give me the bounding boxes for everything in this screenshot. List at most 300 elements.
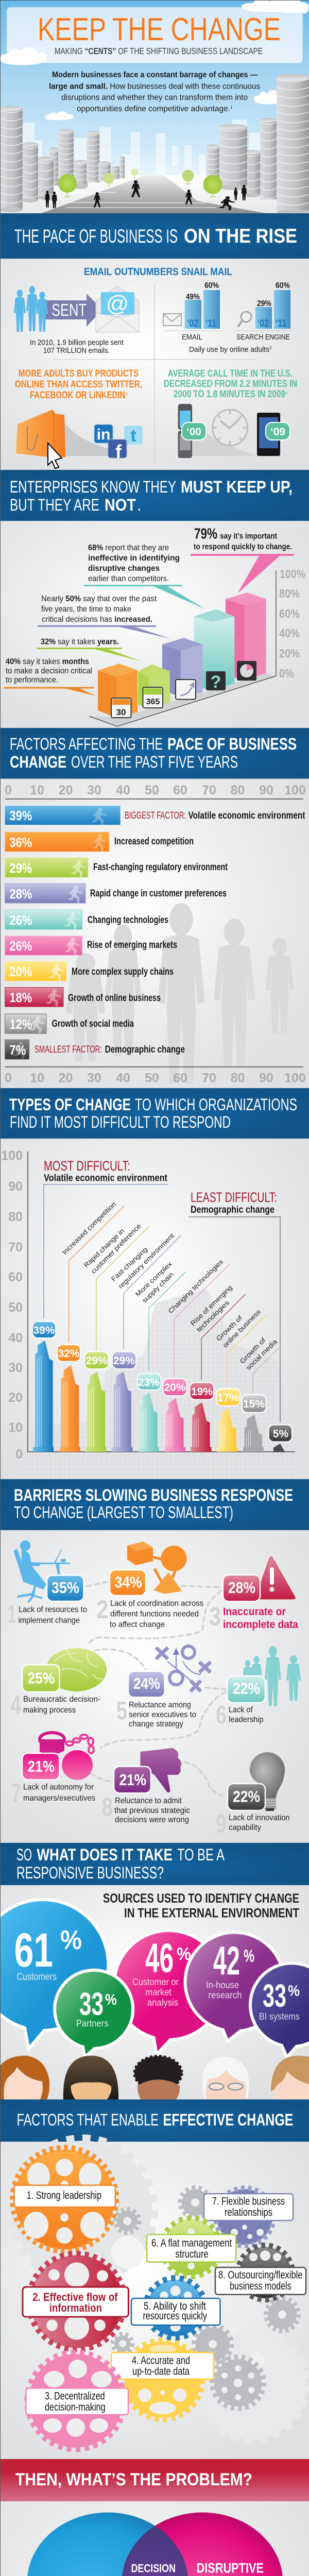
- trees: [58, 168, 222, 197]
- callout: call time: [164, 368, 297, 400]
- pale distant towers: [23, 120, 261, 175]
- callout: 68%: ineffective in identifying: [88, 554, 180, 563]
- bubble: market analysis 46%: analysis: [147, 1997, 178, 2008]
- bar: 26% teal: 26%: [9, 912, 32, 928]
- bubble: BI systems 33%: %: [288, 1982, 300, 1999]
- gear 2: effective flow of information: information: [49, 2301, 102, 2314]
- icon: shopping bag and social media: t: [130, 426, 136, 446]
- gear 2: effective flow of information: 2. Effective flow of: [32, 2291, 118, 2303]
- badges: 29%: [113, 1355, 135, 1367]
- barrier 1: 35%: [52, 1579, 79, 1597]
- bar: 36%: Increased competition: [114, 836, 194, 847]
- barrier 7: managers/executives: [23, 1794, 95, 1803]
- bar: 39%: 39%: [9, 808, 32, 823]
- y axis: 70: [8, 1240, 23, 1255]
- barrier 5: change strategy: [129, 1720, 183, 1728]
- callout: most difficult: MOST DIFFICULT:: [44, 1158, 130, 1174]
- icon: stopwatch: [237, 661, 256, 681]
- heading: factors pace of change: FACTORS AFFECTING THE: [10, 735, 163, 753]
- heading: enterprises must keep up: BUT THEY ARE: [10, 496, 99, 514]
- axis top: 30: [87, 783, 101, 798]
- venn diagram: [27, 2513, 283, 2576]
- bar: 7%: SMALLEST FACTOR:: [35, 1044, 102, 1055]
- axis bottom: 90: [259, 1071, 273, 1086]
- intro text: Modern businesses face a constant barrage of changes —: [52, 71, 258, 79]
- icon: envelope: [163, 314, 181, 326]
- bar chart: daily use: 60%: [276, 281, 290, 290]
- barrier 7: Lack of autonomy for: [23, 1783, 94, 1792]
- bar: 26% teal: Changing technologies: [88, 915, 168, 925]
- callout: online buying: ONLINE THAN ACCESS TWITTER,: [15, 379, 142, 390]
- heading: effective change: [0, 2099, 309, 2142]
- heading: pace of business: [0, 213, 309, 259]
- heading: responsive business: TO BE A: [177, 1845, 225, 1864]
- small gray gears: [113, 2188, 298, 2408]
- ghost runners: [66, 903, 294, 1083]
- icon: people sending email: SENT: [52, 300, 87, 319]
- barrier 8: Reluctance to admit: [115, 1797, 182, 1805]
- barrier 2: 2: [97, 1595, 108, 1624]
- axis top: [5, 783, 306, 800]
- subtitle: MAKING “CENTS” OF THE SHIFTING BUSINESS LANDSCAPE: [55, 46, 263, 56]
- bar chart: daily use: ‘02: [187, 318, 198, 329]
- barrier 5: Reluctance among: [129, 1701, 191, 1709]
- axis bottom: 10: [30, 1071, 44, 1086]
- y axis: 80: [8, 1210, 23, 1224]
- gear 7: flexible business relationships: relationships: [225, 2207, 272, 2218]
- bubble: market analysis 46%: %: [177, 1944, 191, 1964]
- callout: 40%: 40% say it takes months: [6, 657, 89, 666]
- road: [41, 175, 266, 213]
- barrier 8: that previous strategic: [114, 1806, 190, 1815]
- barrier 4: [10, 1648, 107, 1719]
- barrier 6: Lack of: [229, 1706, 253, 1715]
- axis top: 60: [173, 783, 187, 798]
- heading: what's the problem: THEN, WHAT’S THE PROBLEM?: [15, 2470, 252, 2489]
- icon: people sending email: [14, 286, 139, 332]
- panel: enterprises 3D chart: [0, 521, 309, 728]
- gear 4: accurate data: up-to-date data: [132, 2366, 190, 2378]
- barrier 7: 21%: [28, 1757, 55, 1775]
- rotated labels: Growth of: [238, 1336, 267, 1365]
- barrier 6: 22%: [233, 1680, 260, 1697]
- heading: factors pace of change: [0, 728, 309, 779]
- bubble: market analysis 46%: Customer or: [132, 1977, 179, 1987]
- bar: 28%: Rapid change in customer preferences: [90, 888, 227, 899]
- axis labels: 20%: [279, 647, 300, 660]
- axis bottom: 100: [284, 1071, 306, 1086]
- axis top: 40: [116, 783, 130, 798]
- heading: email outnumbers snail mail: EMAIL OUTNUMBERS SNAIL MAIL: [84, 266, 232, 278]
- bar: 7%: [5, 1040, 185, 1059]
- axis bottom: [5, 1066, 306, 1086]
- bar: 36%: 36%: [9, 835, 32, 850]
- gear 8: outsourcing: [215, 2245, 306, 2300]
- gear 7: flexible business relationships: 7. Flexible business: [212, 2196, 285, 2208]
- gear 3: decentralized decision-making: [26, 2352, 128, 2449]
- badges: 17%: [217, 1392, 239, 1404]
- right cylinders: [207, 74, 309, 215]
- bubble: partners 33%: Partners: [76, 2019, 108, 2029]
- icon: phones and clock: ‘09: [270, 426, 285, 438]
- callout: least difficult: LEAST DIFFICULT:: [191, 1190, 277, 1205]
- barrier 2: to affect change: [110, 1620, 165, 1629]
- heading: types of change: TYPES OF CHANGE: [9, 1095, 131, 1114]
- barrier 5: 5: [116, 1696, 127, 1725]
- rotated labels: [61, 1200, 279, 1371]
- badges: [32, 1321, 292, 1442]
- callout: 79%: [191, 526, 294, 594]
- rotated labels: supply chain: [141, 1270, 175, 1304]
- heading: sources: [103, 1891, 299, 1920]
- callout: 40%: to make a decision critical: [6, 667, 92, 675]
- panel: types of change chart: [0, 1139, 309, 1479]
- axis top: 90: [259, 783, 273, 798]
- bar chart: daily use: 49%: [186, 293, 200, 301]
- heading: responsive business: WHAT DOES IT TAKE: [37, 1845, 173, 1864]
- bar: 29%: 29%: [9, 860, 32, 876]
- gear 1: strong leadership: [13, 2148, 116, 2251]
- axis labels: 40%: [279, 626, 300, 640]
- heading: responsive business: [0, 1843, 309, 1885]
- barrier 3: [209, 1557, 298, 1631]
- bar chart: daily use: ‘11: [205, 318, 216, 329]
- barrier 6: 6: [216, 1700, 227, 1729]
- rotated labels: customer preference: [90, 1222, 143, 1275]
- y axis: 90: [8, 1179, 23, 1194]
- barrier 4: 25%: [28, 1669, 55, 1687]
- gear 1: strong leadership: 1. Strong leadership: [27, 2190, 101, 2201]
- barrier 3: Inaccurate or: [223, 1606, 286, 1618]
- heading: what's the problem: [0, 2459, 309, 2501]
- bar chart: daily use: 60%: [204, 281, 219, 290]
- ghost buildings: [15, 1288, 296, 1479]
- heading: enterprises must keep up: [0, 470, 309, 521]
- callout: 40%: [4, 657, 96, 696]
- bar chart: daily use: 2: [269, 346, 272, 350]
- barrier 4: making process: [23, 1706, 76, 1715]
- heading: enterprises must keep up: ENTERPRISES KNOW THEY: [10, 478, 176, 496]
- axis top: 80: [231, 783, 245, 798]
- callout: nearly 50%: Nearly 50% say that over the past: [41, 595, 157, 603]
- callout: 79%: say it’s important: [220, 532, 277, 541]
- bar: 39%: [5, 806, 305, 825]
- callout: most difficult: Volatile economic environment: [44, 1173, 168, 1184]
- gear 4: accurate data: [111, 2340, 214, 2419]
- y axis: 10: [8, 1420, 23, 1435]
- bubble: market analysis 46%: market: [145, 1987, 171, 1997]
- heading: factors pace of change: OVER THE PAST FIVE YEARS: [71, 753, 238, 771]
- text: emails sent: [30, 338, 124, 355]
- icon: phones and clock: ‘00: [186, 426, 201, 438]
- callout: least difficult: [188, 1190, 280, 1422]
- bubble: customers 61%: [0, 1900, 108, 2049]
- bar: 7%: 7%: [9, 1042, 26, 1058]
- bar: 39%: BIGGEST FACTOR:: [125, 810, 186, 821]
- rotated labels: Changing technologies: [167, 1258, 225, 1315]
- axis bottom: 40: [116, 1071, 130, 1086]
- gear 8: outsourcing: business models: [230, 2280, 291, 2292]
- bubble: in-house research 42%: %: [244, 1946, 254, 1966]
- rotated labels: technologies: [195, 1298, 231, 1333]
- heading: responsive business: RESPONSIVE BUSINESS?: [16, 1863, 164, 1882]
- bar: 26% pink: Rise of emerging markets: [87, 940, 177, 951]
- icon: calendar 365: 365: [146, 698, 160, 706]
- axis top: 100: [284, 783, 306, 798]
- gear 6: flat management structure: 6. A flat management: [151, 2238, 232, 2249]
- axis top: 50: [145, 783, 159, 798]
- icon: question mark: ?: [211, 672, 221, 692]
- callout: 68%: earlier than competitors.: [88, 574, 169, 583]
- badges: 23%: [138, 1377, 160, 1388]
- left cylinders: [0, 106, 125, 212]
- icon: calendar 30: [111, 698, 131, 718]
- callout: 32%: [37, 638, 142, 662]
- bar: 12%: Growth of social media: [52, 1019, 134, 1029]
- heading: types of change: [0, 1088, 309, 1139]
- bubble: in-house research 42%: In-house: [206, 1980, 239, 1990]
- axis bottom: 60: [173, 1071, 187, 1086]
- pale background gears: [1, 2138, 308, 2441]
- barrier 1: 1: [8, 1600, 16, 1629]
- overlap label: DECISION: [131, 2562, 176, 2575]
- y axis: 0: [15, 1447, 23, 1462]
- barrier 9: Lack of innovation: [229, 1814, 290, 1822]
- rotated labels: online business: [221, 1308, 262, 1349]
- barrier 5: 24%: [133, 1674, 160, 1692]
- barrier 7: [11, 1733, 95, 1808]
- bubble: BI systems 33%: BI systems: [259, 2011, 300, 2022]
- callout: online buying: MORE ADULTS BUY PRODUCTS: [19, 368, 139, 379]
- badges: 29%: [85, 1355, 108, 1367]
- bar: 18%: [5, 987, 161, 1007]
- axis bottom: 30: [87, 1071, 101, 1086]
- bar: 20%: [5, 961, 174, 981]
- bubble: in-house research 42%: [185, 1933, 284, 2041]
- disruptive label: DISRUPTIVE: [197, 2561, 264, 2576]
- heading: factors pace of change: CHANGE: [10, 753, 66, 771]
- callout: least difficult: Demographic change: [191, 1205, 274, 1215]
- panel: hero skyline: [0, 0, 309, 215]
- badges: 39%: [33, 1325, 55, 1336]
- leader lines: [69, 1206, 279, 1394]
- bar: 26% pink: [5, 936, 177, 955]
- barrier 3: incomplete data: [223, 1619, 298, 1631]
- barrier 8: decisions were wrong: [115, 1816, 189, 1824]
- bubble: partners 33%: %: [105, 1991, 117, 2008]
- bar chart: daily use: ‘11: [276, 318, 286, 329]
- axis bottom: 80: [231, 1071, 245, 1086]
- axis top: 10: [30, 783, 44, 798]
- barrier 4: Bureaucratic decision-: [23, 1695, 100, 1704]
- heading: pace of business: THE PACE OF BUSINESS IS: [14, 226, 178, 247]
- bubble: BI systems 33%: [250, 1963, 309, 2057]
- bar: 20%: More complex supply chains: [72, 967, 174, 977]
- barrier 9: capability: [229, 1823, 261, 1832]
- bubble: in-house research 42%: research: [208, 1990, 242, 2000]
- y axis: 60: [8, 1270, 23, 1284]
- panel: gears: [0, 2138, 309, 2459]
- rotated labels: regulatory environment: [117, 1231, 176, 1290]
- gear 5: shift resources: [131, 2278, 220, 2338]
- callout: nearly 50%: [38, 595, 171, 639]
- icon: calendar arrow: [176, 680, 196, 700]
- title box: [1, 0, 308, 64]
- callout: nearly 50%: critical decisions has increased.: [42, 615, 152, 624]
- y axis: 50: [8, 1300, 23, 1315]
- callout: 40%: to performance.: [6, 676, 58, 684]
- axis labels: 0%: [279, 667, 294, 680]
- barrier 9: [216, 1752, 290, 1838]
- bubble: market analysis 46%: [114, 1930, 224, 2055]
- barrier 8: 8: [102, 1793, 113, 1822]
- gear 6: flat management structure: structure: [176, 2248, 209, 2260]
- bar: 18%: 18%: [9, 990, 32, 1005]
- bar chart: daily use: ‘02: [258, 318, 269, 329]
- callout: call time: 2000 TO 1.8 MINUTES IN 2009: [174, 389, 285, 400]
- bubble: customers 61%: %: [60, 1925, 82, 1955]
- barrier 7: 7: [11, 1779, 21, 1808]
- badges: 32%: [58, 1348, 80, 1360]
- gear 7: flexible business relationships: [204, 2188, 293, 2246]
- barrier 9: 22%: [233, 1788, 260, 1806]
- callout: 68%: [84, 544, 205, 609]
- axis top: 0: [5, 783, 12, 798]
- icon: calendar 30: 30: [116, 707, 126, 717]
- bar: 12%: 12%: [9, 1016, 32, 1032]
- callout: 32%: 32% say it takes years.: [41, 638, 119, 646]
- heads: [0, 2056, 309, 2099]
- gear 2: effective flow of information: [23, 2253, 129, 2349]
- icon: magnifier: [238, 312, 251, 327]
- axis labels: 60%: [279, 607, 300, 620]
- y axis: [1, 1149, 295, 1462]
- y axis: 20: [8, 1391, 23, 1405]
- bar: 20%: 20%: [9, 964, 32, 979]
- icon: people sending email: @: [106, 291, 129, 316]
- bar: 36%: [5, 832, 194, 852]
- barrier 1: [8, 1540, 87, 1629]
- chart: building bars: [33, 1341, 285, 1452]
- rotated labels: social media: [245, 1337, 279, 1371]
- axis labels: 80%: [279, 587, 300, 600]
- gear 5: shift resources: resources quickly: [143, 2310, 207, 2322]
- axis labels: [279, 567, 305, 680]
- bar chart: daily use: EMAIL: [182, 333, 202, 342]
- panel: factors bar chart: [0, 779, 309, 1088]
- axis bottom: 50: [145, 1071, 159, 1086]
- heading: enterprises must keep up: NOT: [105, 496, 136, 514]
- intro text: disruptions and whether they can transform them into: [61, 93, 248, 102]
- barrier 2: [97, 1541, 203, 1629]
- barrier 4: 4: [10, 1690, 21, 1719]
- axis top: 70: [202, 783, 216, 798]
- rotated labels: Growth of: [215, 1314, 244, 1343]
- rotated labels: Rise of emerging: [189, 1283, 234, 1327]
- heading: enterprises must keep up: .: [137, 496, 142, 514]
- bubble: customers 61%: 61: [14, 1923, 53, 1977]
- heading: enterprises must keep up: MUST KEEP UP,: [181, 478, 293, 496]
- rotated labels: Rapid change in: [82, 1227, 126, 1269]
- dashed path: [87, 1582, 227, 1796]
- barrier 8: 21%: [119, 1771, 146, 1789]
- panel: pace of business stats: [0, 259, 309, 470]
- icon: shopping bag and social media: f: [115, 441, 122, 462]
- intro text: large and small. How businesses deal with these continuous: [49, 82, 260, 91]
- icon: question mark: [206, 671, 226, 692]
- icon: shopping bag and social media: in: [97, 426, 110, 443]
- badges: 19%: [191, 1386, 213, 1398]
- barrier 1: Lack of resources to: [19, 1605, 87, 1614]
- bubble: BI systems 33%: 33: [263, 1978, 286, 2014]
- heading: pace of business: ON THE RISE: [184, 225, 297, 247]
- icon: shopping bag and social media: [16, 410, 143, 468]
- axis bottom: 0: [5, 1071, 12, 1086]
- barrier 5: [116, 1646, 211, 1728]
- callout: online buying: 3: [125, 392, 128, 396]
- barrier 2: 34%: [115, 1573, 142, 1591]
- gear 6: flat management structure: [147, 2218, 236, 2277]
- callout: most difficult: [44, 1158, 168, 1318]
- barrier 6: leadership: [229, 1716, 264, 1724]
- bubble: partners 33%: [55, 1970, 133, 2057]
- barrier 2: different functions needed: [110, 1610, 199, 1619]
- rotated labels: Increased competition: [61, 1200, 117, 1256]
- callout: nearly 50%: five years, the time to make: [41, 605, 131, 614]
- bubble: in-house research 42%: 42: [213, 1938, 240, 1984]
- intro text: opportunities define competitive advantage.: [77, 105, 230, 113]
- panel: problem venn diagram: [0, 2501, 309, 2576]
- gear 3: decentralized decision-making: 3. Decentralized: [45, 2391, 105, 2402]
- y axis: 30: [8, 1361, 23, 1375]
- bar chart: daily use: SEARCH ENGINE: [236, 333, 290, 342]
- icon: calendar 365: [143, 687, 163, 708]
- callout: 68%: disruptive changes: [88, 564, 160, 573]
- icon: phones and clock: [178, 404, 290, 458]
- bar chart: daily use: Daily use by online adults: [189, 346, 269, 354]
- bar: 29%: Fast-changing regulatory environment: [93, 862, 228, 873]
- barrier 6: [216, 1646, 301, 1729]
- bar chart: daily use: [163, 281, 294, 354]
- barrier 8: [102, 1748, 190, 1824]
- barrier 1: implement change: [19, 1616, 80, 1625]
- bar: 28%: [5, 884, 227, 903]
- bubble: customers 61%: Customers: [16, 1972, 57, 1982]
- callout: 79%: to respond quickly to change.: [194, 543, 292, 551]
- rotated labels: More complex: [134, 1260, 174, 1298]
- bar: 26% pink: 26%: [9, 938, 32, 954]
- text: emails sent: In 2010, 1.9 billion people sent: [30, 338, 124, 347]
- rotated labels: Fast-changing: [110, 1246, 149, 1283]
- axis top: 20: [59, 783, 73, 798]
- barrier 9: 9: [216, 1809, 227, 1838]
- callout: 68%: 68% report that they are: [88, 544, 169, 552]
- bar: 29%: [5, 858, 228, 877]
- intro text: [49, 71, 260, 113]
- axis bottom: 20: [59, 1071, 73, 1086]
- bar: 12%: [5, 1014, 134, 1033]
- barrier 2: Lack of coordination across: [110, 1599, 203, 1608]
- heading: barriers: [0, 1479, 309, 1530]
- gear 5: shift resources: 5. Ability to shift: [144, 2300, 206, 2312]
- heading: effective change: FACTORS THAT ENABLE: [16, 2110, 159, 2129]
- ground: [0, 175, 309, 213]
- panel: sources speech bubbles: [0, 1885, 309, 2099]
- bubble: market analysis 46%: 46: [145, 1935, 174, 1980]
- badges: 15%: [243, 1398, 265, 1410]
- bar chart: daily use: 29%: [257, 299, 271, 308]
- panel: barriers: [0, 1530, 309, 1843]
